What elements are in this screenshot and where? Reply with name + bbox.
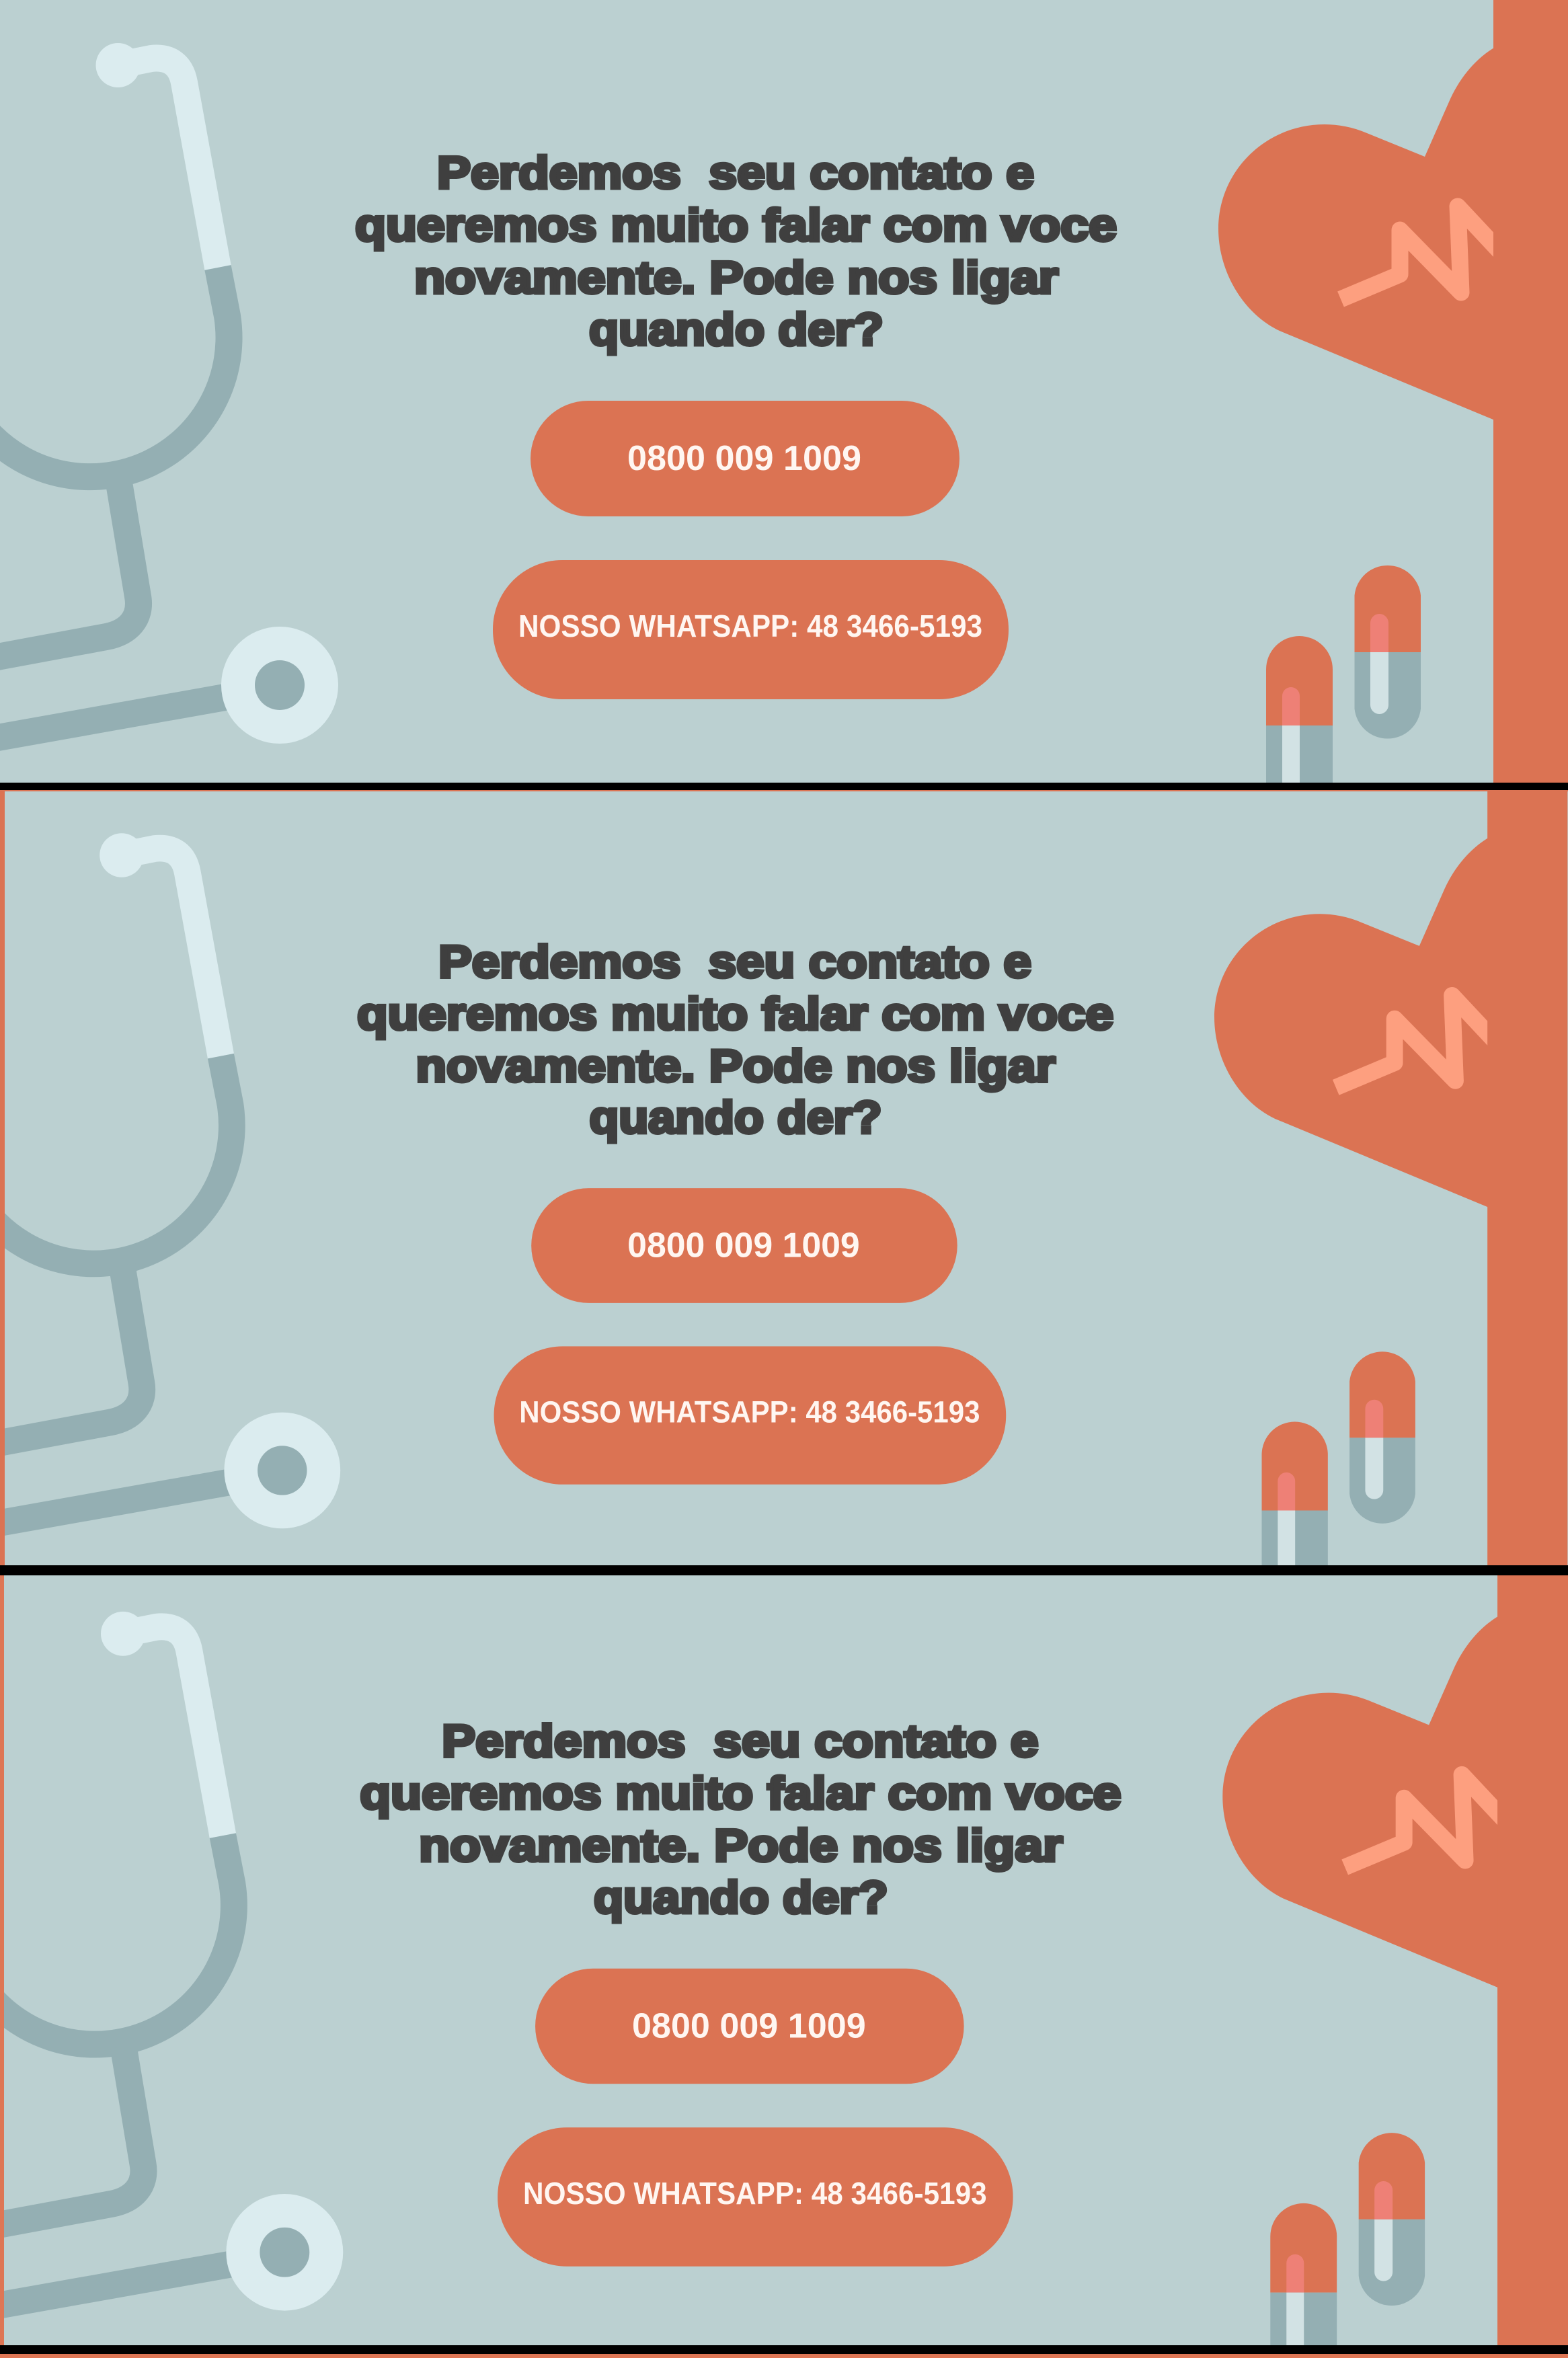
button: phone number: 0800 009 1009 [632, 2006, 866, 2045]
icon: capsule left [1261, 1421, 1328, 1565]
button: whatsapp: NOSSO WHATSAPP: 48 3466-5193 [519, 1395, 980, 1429]
heading: message: Perdemos seu contato e [437, 147, 1034, 198]
icon: capsule left [1270, 2203, 1337, 2358]
icon: stethoscope [0, 43, 338, 744]
button: phone number [535, 1969, 964, 2084]
icon: capsule left [1266, 636, 1333, 783]
icon: heart with pulse [1222, 1569, 1568, 2358]
heading: message: quando der? [590, 1093, 882, 1143]
button: whatsapp: NOSSO WHATSAPP: 48 3466-5193 [518, 608, 982, 643]
button: phone number: 0800 009 1009 [627, 1225, 860, 1264]
button: whatsapp [498, 2127, 1013, 2267]
heading: message: novamente. Pode nos ligar [416, 1041, 1056, 1091]
button: whatsapp: NOSSO WHATSAPP: 48 3466-5193 [523, 2176, 987, 2211]
heading: message [355, 147, 1117, 355]
heading: message: Perdemos seu contato e [442, 1716, 1039, 1766]
heading: message: queremos muito falar com voce [355, 200, 1117, 251]
heading: message: quando der? [594, 1873, 888, 1923]
icon: stethoscope [0, 1612, 343, 2311]
heading: message: quando der? [589, 304, 884, 355]
heading: message: queremos muito falar com voce [357, 989, 1113, 1039]
heading: message [360, 1716, 1121, 1923]
button: phone number [531, 401, 959, 516]
panel: contact card 2 [0, 784, 1568, 1598]
button: whatsapp [493, 560, 1009, 699]
icon: heart with pulse [1214, 784, 1567, 1585]
heading: message: novamente. Pode nos ligar [414, 252, 1058, 303]
icon: capsule right [1354, 565, 1421, 739]
button: phone number: 0800 009 1009 [627, 439, 861, 478]
heading: message [357, 937, 1113, 1143]
heading: message: queremos muito falar com voce [360, 1768, 1121, 1819]
panel: contact card 1 [0, 0, 1568, 813]
button: whatsapp [494, 1346, 1006, 1485]
button: phone number [531, 1188, 957, 1303]
heading: message: Perdemos seu contato e [438, 937, 1031, 988]
panel: contact card 3 [0, 1569, 1568, 2358]
heading: message: novamente. Pode nos ligar [419, 1821, 1062, 1871]
icon: stethoscope [0, 833, 340, 1528]
icon: heart with pulse [1218, 0, 1568, 807]
icon: capsule right [1349, 1351, 1415, 1524]
icon: capsule right [1359, 2133, 1425, 2306]
